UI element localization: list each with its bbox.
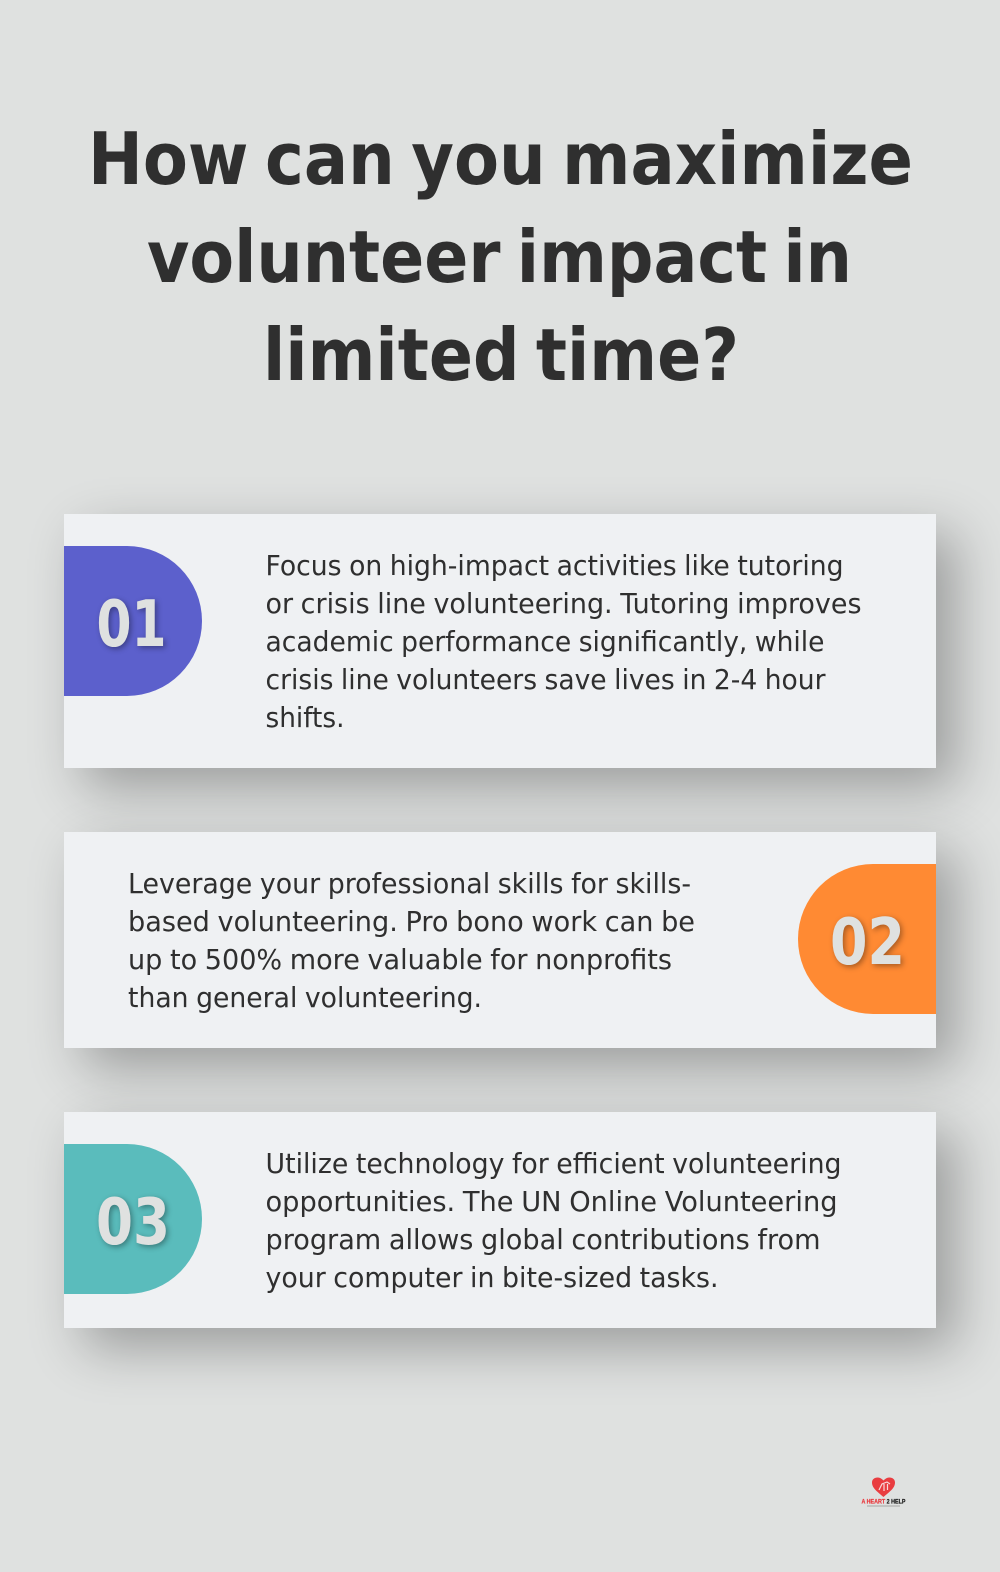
- badge: 02: 02: [830, 906, 905, 980]
- text: step 01 description: Focus on high-impact activities like tutoring: [266, 549, 844, 582]
- text: step 01 description: crisis line volunteers save lives in 2-4 hour: [266, 663, 826, 696]
- badge: 02: [798, 864, 936, 1014]
- logo: A Heart 2 Help: [862, 1478, 906, 1506]
- text: step 03 description: your computer in bite-sized tasks.: [266, 1261, 718, 1294]
- text: step 01 description: or crisis line volunteering. Tutoring improves: [266, 587, 862, 620]
- text: step 03 description: opportunities. The UN Online Volunteering: [266, 1185, 838, 1218]
- title: limited time?: [263, 313, 739, 397]
- badge: 03: [64, 1144, 202, 1294]
- text: step 02 description: [128, 867, 695, 1014]
- badge: 01: [64, 546, 202, 696]
- text: step 03 description: Utilize technology for efficient volunteering: [266, 1147, 842, 1180]
- text: step 02 description: Leverage your professional skills for skills-: [128, 867, 691, 900]
- text: step 02 description: up to 500% more valuable for nonprofits: [128, 943, 672, 976]
- panel: step 03: [64, 1112, 936, 1328]
- badge: 01: 01: [96, 588, 166, 662]
- text: step 02 description: based volunteering. Pro bono work can be: [128, 905, 695, 938]
- logo wordmark: A HEART 2 HELP: [862, 1500, 906, 1506]
- title: volunteer impact in: [147, 215, 852, 299]
- title: [88, 117, 913, 397]
- text: step 03 description: program allows global contributions from: [266, 1223, 820, 1256]
- panel: step 01: [64, 514, 936, 768]
- text: step 01 description: [266, 549, 862, 734]
- icon: heart: [872, 1477, 895, 1497]
- text: step 01 description: shifts.: [266, 701, 344, 734]
- text: step 01 description: academic performance significantly, while: [266, 625, 824, 658]
- text: step 03 description: [266, 1147, 842, 1294]
- panel: step 02: [64, 832, 936, 1048]
- text: step 02 description: than general volunteering.: [128, 981, 482, 1014]
- badge: 03: 03: [96, 1186, 170, 1260]
